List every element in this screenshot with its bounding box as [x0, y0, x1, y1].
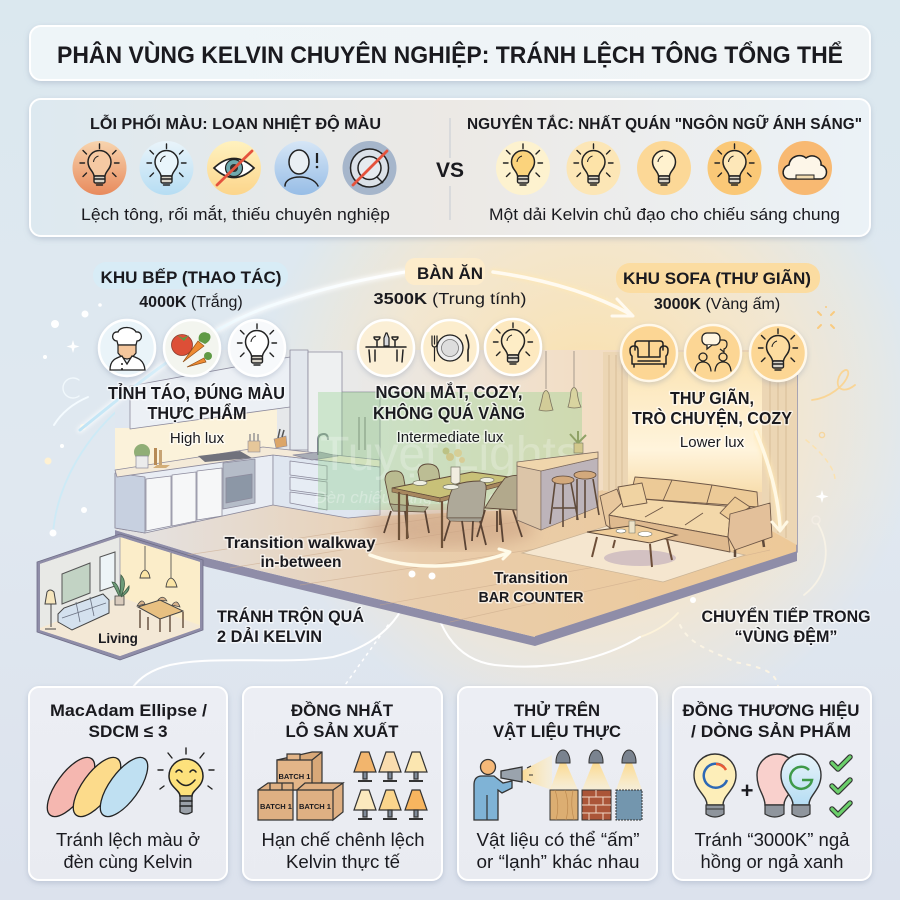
sub-illustration: watermark: Đèn chiếu sáng không gian của bạn [314, 488, 586, 507]
caption: mistake result: Lệch tông, rối mắt, thiếu chuyên nghiệp [81, 205, 390, 224]
icon: batch boxes: BATCH 1 [279, 772, 310, 781]
icon: batch boxes: BATCH 1 [299, 802, 331, 811]
card caption: Hạn chế chênh lệch [262, 830, 424, 850]
sofa heading: KHU SOFA (THƯ GIÃN) [623, 268, 811, 288]
icon: cool mismatched bulb [140, 141, 194, 195]
icon: tomato and carrots [164, 320, 220, 376]
kitchen benefit text: High lux [170, 430, 225, 447]
icon: white bulb [229, 320, 285, 376]
icon: neutral bulb [485, 319, 541, 375]
icon: smiling bulb [158, 748, 214, 814]
label: avoid mixing more than 2 Kelvin ranges: TRÁNH TRỘN QUÁ [217, 607, 364, 626]
icon: person with megaphone [474, 755, 552, 820]
sub-illustration: sofa zone with curtains and rug [522, 352, 797, 582]
card caption: đèn cùng Kelvin [64, 852, 192, 872]
flow arrows between zones [80, 272, 787, 580]
sub-illustration: watermark [314, 392, 586, 510]
icon: batch boxes: BATCH 1 [260, 802, 292, 811]
panel: same brand [673, 687, 871, 880]
caption: principle: Một dải Kelvin chủ đạo cho chiếu sáng chung [489, 205, 840, 224]
card heading: MacAdam Ellipse / [50, 701, 207, 720]
icon: pink and green bulbs [757, 754, 821, 817]
sub-illustration: dining table and chairs [365, 448, 535, 550]
label: avoid mixing more than 2 Kelvin ranges: 2 DẢI KELVIN [217, 627, 322, 646]
mini room label: Living [98, 631, 138, 646]
sub-illustration: watermark: Tuyệt Lights [320, 428, 580, 481]
dining benefit text: Intermediate lux [397, 429, 504, 446]
dining heading [374, 258, 526, 308]
icon: ceiling light cloud [778, 141, 832, 195]
card caption: Vật liệu có thể “ấm” [476, 830, 640, 850]
zone: dining [358, 258, 541, 446]
icon: sofa [621, 325, 677, 381]
kitchen heading [93, 262, 288, 311]
card heading: ĐỒNG THƯƠNG HIỆU [682, 701, 860, 720]
label: transition in buffer zone: CHUYỂN TIẾP TRONG [702, 607, 870, 626]
label: transition bar counter: BAR COUNTER [478, 589, 584, 606]
dining benefit text: NGON MẮT, COZY, [376, 381, 522, 402]
heading: consistency principle: NGUYÊN TẮC: NHẤT QUÁN "NGÔN NGỮ ÁNH SÁNG" [467, 113, 862, 133]
title card [30, 26, 870, 80]
dining heading: 3500K (Trung tính) [374, 291, 526, 308]
icon: dining table [358, 320, 414, 376]
panel: real material test [458, 687, 657, 880]
dining heading: BÀN ĂN [417, 264, 483, 283]
dining benefit text [373, 381, 525, 446]
icon: crossed-out eye [207, 141, 261, 195]
sub-illustration: bar counter and stools [517, 351, 599, 530]
card caption: hồng or ngả xanh [700, 852, 844, 872]
kitchen heading: KHU BẾP (THAO TÁC) [100, 268, 282, 287]
label: transition in buffer zone [702, 607, 870, 646]
card caption [694, 830, 851, 872]
chart: overlapping colour ellipses [39, 750, 156, 824]
sofa benefit text [632, 387, 792, 451]
card caption: or “lạnh” khác nhau [476, 852, 640, 872]
card heading [286, 701, 399, 741]
sub-illustration: kitchen [115, 350, 380, 533]
zone: sofa [616, 263, 820, 451]
card heading [493, 701, 621, 741]
icon: warm bulb 1 [496, 141, 550, 195]
dining benefit text: KHÔNG QUÁ VÀNG [373, 402, 525, 423]
icon: warm bulb [750, 325, 806, 381]
card heading: SDCM ≤ 3 [88, 722, 168, 741]
panel: MacAdam ellipse [29, 687, 227, 880]
icon: chef [99, 320, 155, 376]
icon: batch boxes [258, 752, 343, 820]
card heading: VẬT LIỆU THỰC [493, 722, 621, 741]
card heading: THỬ TRÊN [514, 701, 600, 720]
card caption: Tránh lệch màu ở [56, 830, 200, 850]
kitchen benefit text: THỰC PHẨM [148, 402, 246, 423]
icon: warm bulb 4 [708, 141, 762, 195]
icon: spotlights over materials [550, 750, 642, 820]
card heading [682, 701, 860, 741]
illustration: open-plan kitchen, dining and sofa room [115, 350, 797, 646]
card caption: Tránh “3000K” ngả [694, 830, 851, 850]
icon: check marks [832, 757, 850, 815]
label: transition bar counter: Transition [494, 570, 568, 587]
icon: warm mismatched bulb [72, 141, 126, 195]
sofa heading: 3000K (Vàng ấm) [654, 296, 780, 313]
card caption [56, 830, 200, 872]
label: transition walkway: Transition walkway [224, 535, 376, 552]
icon: plate and cutlery [422, 320, 478, 376]
icon: people talking [685, 325, 741, 381]
card heading [50, 701, 207, 741]
heading: colour mistake: LỖI PHỐI MÀU: LOẠN NHIỆT ĐỘ MÀU [90, 113, 381, 133]
kitchen benefit text: TỈNH TÁO, ĐÚNG MÀU [108, 382, 285, 403]
sofa benefit text: Lower lux [680, 434, 745, 451]
label: transition walkway [224, 535, 376, 571]
plus sign: + [741, 778, 753, 803]
kitchen benefit text [108, 382, 285, 447]
label: transition walkway: in-between [261, 554, 341, 571]
card caption [262, 830, 424, 872]
zone: kitchen [93, 262, 288, 447]
icon: crossed-out plate [342, 141, 396, 195]
icon: confused person [274, 141, 328, 195]
icon: warm bulb 3 [637, 141, 691, 195]
illustration: mini living room [37, 534, 203, 660]
title: PHÂN VÙNG KELVIN CHUYÊN NGHIỆP: TRÁNH LỆCH TÔNG TỔNG THỂ [57, 41, 843, 69]
panel: comparison of colour mistakes versus consistency [30, 99, 870, 236]
sofa benefit text: TRÒ CHUYỆN, COZY [632, 407, 792, 428]
card heading: / DÒNG SẢN PHẨM [691, 722, 851, 741]
panel: production batch [243, 687, 442, 880]
sofa heading [616, 263, 820, 313]
sofa benefit text: THƯ GIÃN, [670, 387, 754, 408]
card heading: LÔ SẢN XUẤT [286, 722, 399, 741]
icon: warm bulb 2 [566, 141, 620, 195]
decorative sparkles and arcs [43, 303, 855, 687]
label: transition in buffer zone: “VÙNG ĐỆM” [734, 627, 838, 646]
kitchen heading: 4000K (Trắng) [139, 292, 243, 311]
icon: branded warm bulb [694, 754, 736, 817]
VS label: VS [436, 159, 464, 182]
icon: table lamps [354, 752, 427, 819]
label: avoid mixing more than 2 Kelvin ranges [217, 607, 364, 646]
card heading: ĐỒNG NHẤT [291, 701, 394, 720]
card caption [476, 830, 640, 872]
card caption: Kelvin thực tế [286, 852, 400, 872]
label: transition bar counter [478, 570, 584, 606]
